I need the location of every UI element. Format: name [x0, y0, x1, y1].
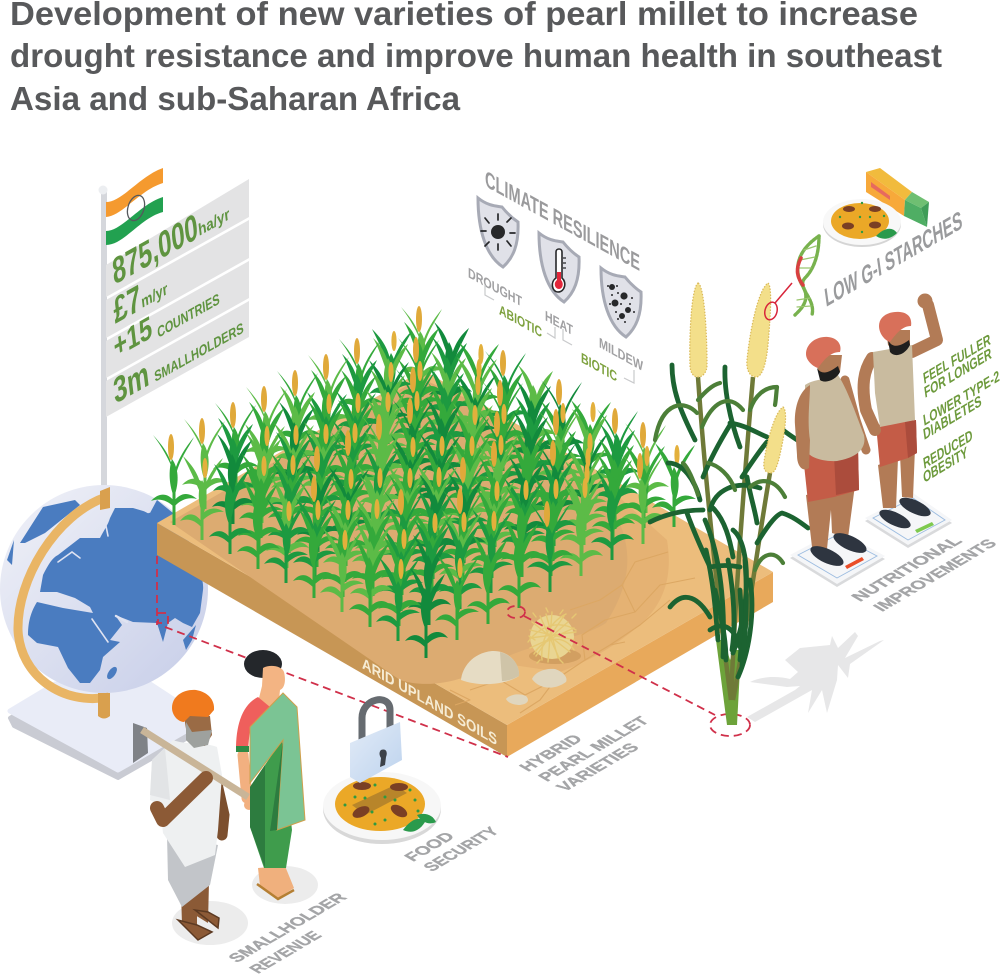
darker shaded soil [170, 378, 627, 684]
abiotic and biotic labels [499, 302, 617, 386]
icon: flag of India [106, 168, 163, 245]
seas [58, 505, 148, 642]
feet and sandals [258, 866, 294, 898]
label: nutritional improvements: IMPROVEMENTS [869, 536, 1000, 614]
continents [7, 500, 203, 683]
man before: overweight [795, 337, 869, 570]
leaves [650, 365, 813, 677]
arm [243, 755, 247, 798]
dashed connector: globe to field and people [157, 556, 508, 757]
title [10, 0, 942, 117]
label: hybrid pearl millet varieties: VARIETIES [552, 740, 643, 794]
legs [806, 485, 855, 549]
plant shadow [747, 632, 884, 722]
legs [878, 448, 915, 508]
globe sphere [0, 485, 208, 693]
left arm [864, 358, 875, 430]
flag pole [98, 186, 108, 492]
icon: drought shield [478, 198, 518, 267]
rocks [461, 651, 567, 705]
far arm [215, 775, 224, 835]
hair [244, 650, 282, 678]
farmer with hoe [133, 690, 248, 945]
face [184, 716, 212, 746]
dhoti [167, 835, 218, 907]
man after: healthy [864, 294, 937, 532]
health benefit labels: OBESITY [922, 444, 969, 487]
abiotic and biotic labels: BIOTIC [581, 350, 617, 386]
stat: countries: COUNTRIES [156, 290, 221, 342]
stat: hectares: ha/yr [197, 204, 231, 240]
scale under second man [865, 493, 952, 548]
stat: countries: +15 [112, 310, 154, 365]
globe with stand [0, 485, 208, 778]
icon: heat shield [539, 233, 579, 302]
field of millet plants [151, 306, 696, 658]
lower sheath [716, 640, 741, 725]
near arm [795, 385, 810, 469]
globe base [10, 690, 205, 778]
neck and face [258, 666, 285, 712]
panel: climate resilience [468, 166, 644, 386]
stat: hectares: 875,000 [110, 206, 200, 293]
icon: DNA helix [795, 236, 819, 315]
panicles [690, 283, 786, 473]
panel: key statistics [106, 179, 249, 417]
torso [873, 345, 915, 427]
shield labels: DROUGHT [468, 265, 523, 311]
shorts [803, 448, 859, 502]
label: nutritional improvements: NUTRITIONAL [847, 534, 966, 604]
shield labels: MILDEW [599, 335, 644, 375]
shorts [876, 420, 917, 467]
globe support arc [18, 497, 109, 699]
abiotic and biotic labels: ABIOTIC [499, 302, 542, 341]
sari drape [250, 693, 305, 830]
skirt [250, 740, 292, 868]
shirt [150, 740, 222, 867]
stat: smallholders: SMALLHOLDERS [154, 320, 244, 386]
beard [817, 366, 840, 382]
label: hybrid pearl millet varieties: HYBRID [515, 732, 587, 774]
ground shadow [172, 901, 248, 945]
tumbleweed [528, 608, 581, 664]
icon: grain box [866, 168, 929, 227]
label: hybrid pearl millet varieties: PEARL MILLET [534, 714, 654, 784]
sandals [178, 910, 219, 940]
head [815, 355, 842, 378]
beard [186, 722, 212, 748]
stat: value per year: m/yr [140, 278, 169, 312]
beard [888, 340, 910, 355]
stat: countries [112, 290, 221, 365]
title: Asia and sub-Saharan Africa [10, 80, 461, 117]
shield labels: HEAT [545, 308, 574, 339]
hoe [133, 723, 248, 797]
near arm [157, 778, 206, 820]
health benefit labels [922, 331, 1000, 487]
hybrid pearl millet plant [650, 283, 813, 725]
soil block [157, 523, 507, 757]
brackets [485, 285, 634, 383]
stat: value per year: £7 [111, 277, 143, 332]
title: drought resistance and improve human health in southeast [10, 37, 942, 74]
label: smallholder revenue: SMALLHOLDER [224, 890, 351, 965]
dashed connector: field plant to hybrid millet [507, 606, 750, 736]
shoes [808, 529, 869, 570]
turban [879, 312, 911, 342]
stat: smallholders: 3m [111, 354, 151, 412]
icon: mildew shield [601, 268, 641, 337]
label: arid upland soils: ARID UPLAND SOILS [362, 654, 497, 749]
far arm [845, 380, 866, 450]
heading: CLIMATE RESILIENCE [485, 166, 640, 277]
red zoom marker [763, 283, 792, 321]
icon: padlock [350, 700, 402, 783]
icon: plate of food [823, 199, 901, 247]
shield labels [468, 265, 644, 375]
low G-I starches group [763, 168, 964, 321]
health benefit labels: REDUCED [922, 427, 974, 473]
scale under first man [790, 530, 885, 587]
stems [698, 377, 770, 700]
lighter shaded soil [420, 378, 669, 672]
stat: smallholders [111, 320, 244, 412]
head [886, 330, 910, 352]
label: food security: FOOD [400, 829, 459, 864]
label: food security: SECURITY [419, 824, 503, 874]
turban [172, 690, 214, 722]
field plot: arid upland soils [157, 370, 773, 757]
soil cracks [450, 552, 695, 713]
torso [805, 375, 864, 461]
shoes [877, 494, 933, 532]
blouse [236, 697, 270, 750]
woman in green sari [236, 650, 318, 904]
legs [181, 882, 209, 932]
turban [806, 337, 840, 368]
raised arm [912, 305, 937, 352]
food plate [323, 772, 441, 844]
ground shadow [252, 866, 318, 904]
